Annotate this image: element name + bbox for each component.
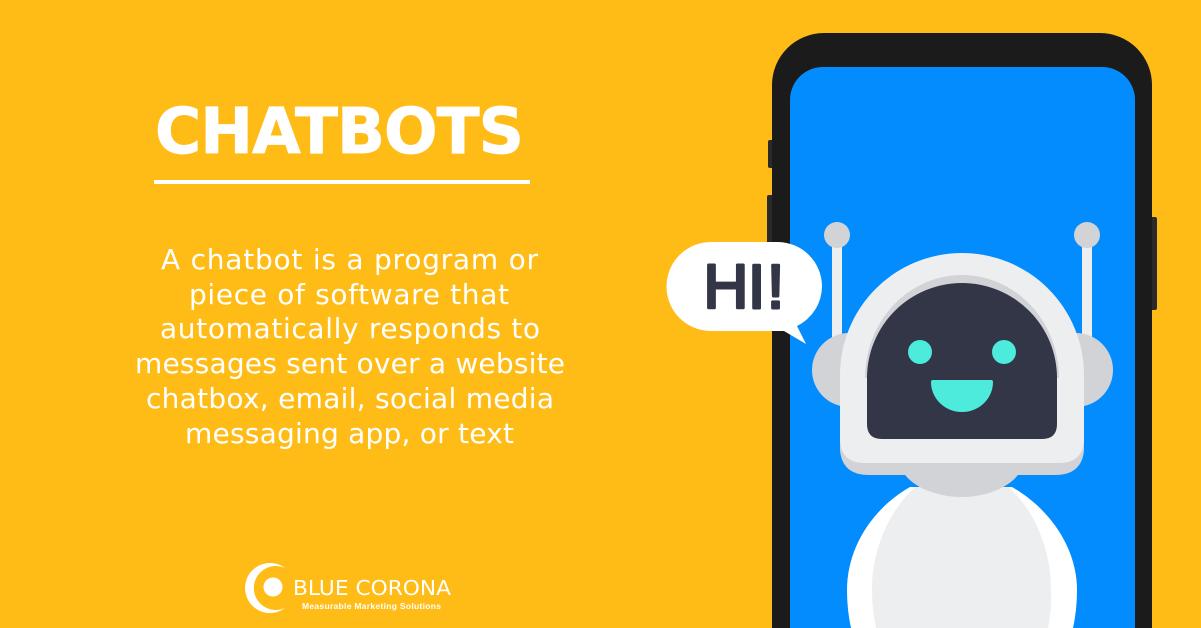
robot body (847, 487, 1077, 628)
logo icon (245, 563, 285, 613)
robot face (867, 283, 1057, 439)
phone body (772, 33, 1152, 628)
description text block: messaging app, or text (185, 417, 514, 450)
robot face rim (865, 275, 1059, 378)
robot eyes (908, 340, 1016, 364)
phone side buttons (767, 140, 1157, 310)
description text block: automatically responds to (160, 312, 540, 345)
phone (767, 33, 1157, 628)
title underline (154, 180, 530, 184)
title: CHATBOTS: CHATBOTS (155, 95, 524, 168)
robot head shadow (840, 440, 1084, 475)
phone screen (790, 67, 1135, 628)
description text block: messages sent over a website (135, 347, 565, 380)
bubble shape (666, 242, 822, 344)
speech bubble (666, 242, 822, 344)
bubble text: HI! (704, 253, 784, 322)
description text block: A chatbot is a program or (161, 243, 538, 276)
robot antennas (824, 222, 1100, 345)
robot (812, 222, 1113, 628)
robot head (840, 253, 1084, 463)
robot neck (903, 460, 1020, 497)
logo: Blue Corona (245, 563, 451, 613)
robot ears (812, 333, 1113, 407)
description text block (135, 243, 565, 450)
logo tagline: Measurable Marketing Solutions (302, 601, 441, 611)
robot mouth (931, 380, 993, 412)
description text block: chatbox, email, social media (146, 382, 554, 415)
logo wordmark: BLUE CORONA (293, 576, 451, 600)
description text block: piece of software that (189, 278, 509, 311)
